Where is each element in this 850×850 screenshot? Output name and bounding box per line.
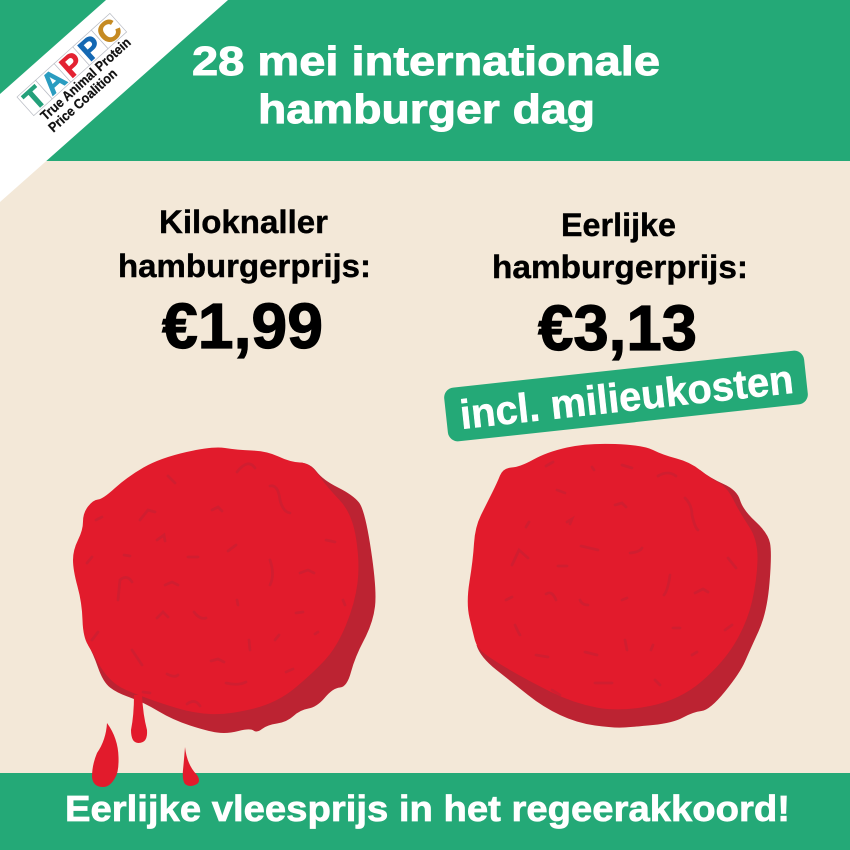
right patty — [468, 444, 771, 728]
header band — [0, 0, 850, 161]
right price block: Eerlijke — [561, 207, 676, 243]
left price block — [118, 204, 371, 362]
logo: TAPPC: T — [17, 80, 53, 117]
patty texture right — [506, 462, 736, 695]
logo: TAPPC: Price Coalition — [45, 66, 120, 135]
title: 28 mei internationale — [192, 38, 660, 84]
callout: incl. milieukosten: incl. milieukosten — [458, 356, 796, 438]
logo: TAPPC: P — [73, 30, 110, 67]
left price block: Kiloknaller — [159, 204, 328, 240]
right price block — [492, 207, 748, 364]
logo: TAPPC: C — [91, 12, 129, 51]
right price block: €3,13 — [538, 292, 697, 364]
blood drips — [92, 695, 199, 787]
title: hamburger dag — [258, 86, 595, 132]
logo: TAPPC — [15, 11, 146, 137]
patty texture left — [87, 464, 345, 706]
logo: TAPPC: A — [35, 62, 73, 101]
left price block: €1,99 — [162, 290, 323, 362]
corner ribbon — [0, 0, 228, 202]
footer text: Eerlijke vleesprijs in het regeerakkoord! — [65, 788, 790, 829]
left patty — [73, 448, 376, 733]
left price block: hamburgerprijs: — [118, 248, 371, 284]
logo: TAPPC: True Animal Protein — [37, 35, 134, 123]
logo: TAPPC: P — [54, 46, 91, 84]
right price block: hamburgerprijs: — [492, 249, 748, 285]
title — [192, 38, 660, 132]
footer band — [0, 773, 850, 850]
